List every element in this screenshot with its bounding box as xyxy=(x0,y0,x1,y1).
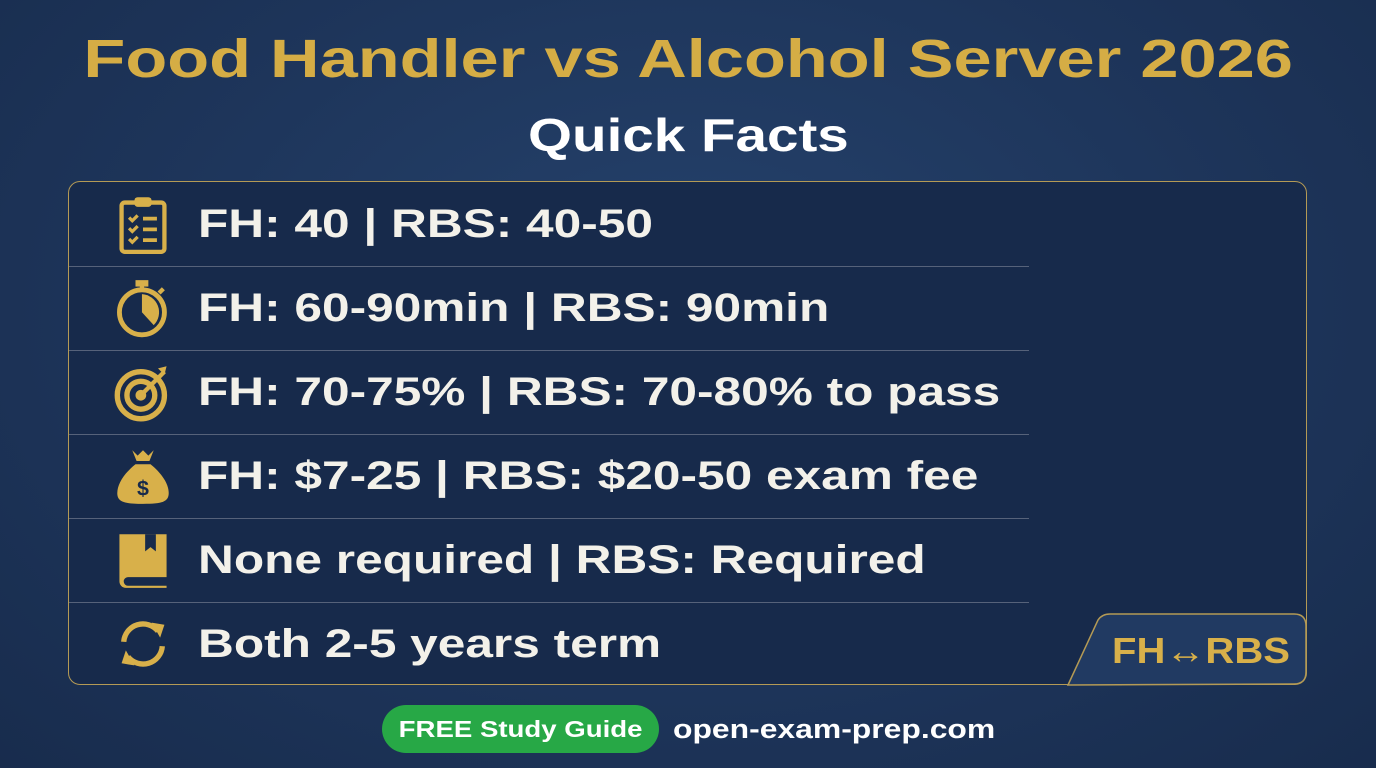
row: pass score xyxy=(69,350,1029,435)
badge: FH-RBS: FH↔RBS xyxy=(1112,630,1290,671)
row: fee: FH: $7-25 | RBS: $20-50 exam fee xyxy=(198,454,978,498)
row: time xyxy=(69,266,1029,351)
icon: stopwatch xyxy=(117,280,167,338)
row: pass score: FH: 70-75% | RBS: 70-80% to pass xyxy=(198,370,1000,414)
row: training xyxy=(69,518,1029,603)
panel: quick facts xyxy=(68,181,1307,685)
row: questions: FH: 40 | RBS: 40-50 xyxy=(198,202,653,246)
subtitle: Quick Facts xyxy=(528,109,848,161)
icon: refresh xyxy=(121,621,165,667)
icon: book xyxy=(119,534,167,588)
row: training: None required | RBS: Required xyxy=(198,538,926,582)
row: fee xyxy=(69,434,1029,519)
icon: money bag: $ xyxy=(137,476,149,500)
footer: study guide pill: FREE Study Guide xyxy=(399,716,642,742)
icon: target xyxy=(114,366,168,422)
title: Food Handler vs Alcohol Server 2026 xyxy=(83,29,1293,89)
row: questions xyxy=(69,182,1029,267)
row: term: Both 2-5 years term xyxy=(198,622,661,666)
footer: url: open-exam-prep.com xyxy=(673,714,995,744)
badge: FH-RBS xyxy=(1066,613,1306,686)
icon: clipboard xyxy=(119,197,167,254)
icon: money bag xyxy=(117,450,169,504)
footer: study guide pill xyxy=(382,705,659,753)
row: time: FH: 60-90min | RBS: 90min xyxy=(198,286,829,330)
